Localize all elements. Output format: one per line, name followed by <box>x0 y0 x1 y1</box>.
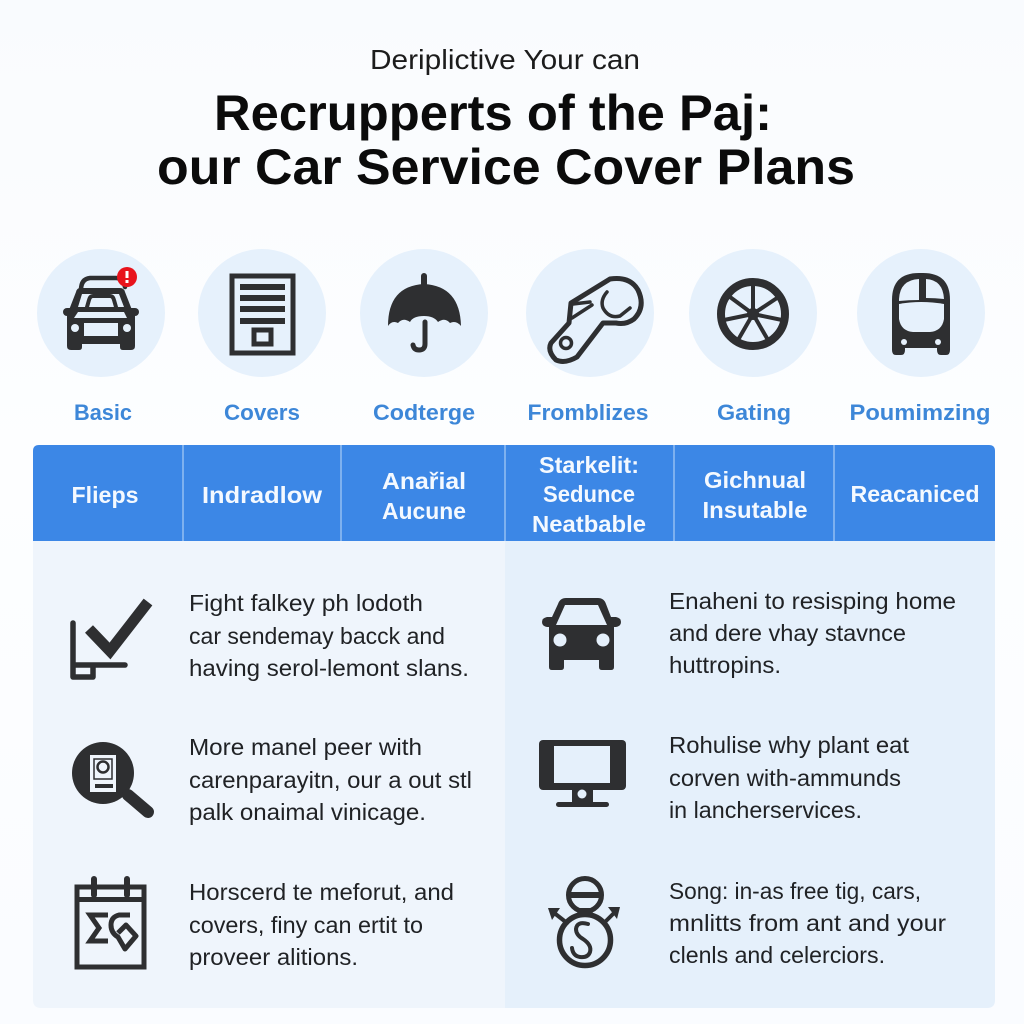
table header: Insutable <box>702 497 808 523</box>
text: right row 2: Rohulise why plant eat <box>669 732 910 758</box>
title <box>157 85 855 195</box>
label: Poumimzing: Poumimzing <box>850 400 990 425</box>
text: right row 1: and dere vhay stavnce <box>669 620 906 646</box>
text: left row 2: More manel peer with <box>189 734 422 760</box>
icon: checkmark <box>73 602 148 677</box>
text: left row 2: palk onaimal vinicage. <box>189 799 426 825</box>
text: left row 2: carenparayitn, our a out stl <box>189 767 472 793</box>
text: right row 1: huttropins. <box>669 652 781 678</box>
icon: wrench <box>526 249 654 377</box>
table header: Neatbable <box>532 511 646 537</box>
text: right row 1: Enaheni to resisping home <box>669 588 956 614</box>
text: right row 2: in lancherservices. <box>669 797 862 823</box>
text: left row 1 <box>189 590 469 681</box>
table header: Starkelit: <box>539 452 639 478</box>
panel: left column <box>33 541 505 1008</box>
table header: Sedunce <box>543 481 635 507</box>
text: left row 1: car sendemay bacck and <box>189 623 445 649</box>
text: left row 3: Horscerd te meforut, and <box>189 879 454 905</box>
title: our Car Service Cover Plans <box>157 139 855 195</box>
icon: calendar <box>77 879 144 967</box>
icon: car front <box>542 598 621 670</box>
text: right row 1 <box>669 588 956 678</box>
label: Gating: Gating <box>717 400 791 425</box>
text: left row 3: proveer alitions. <box>189 944 358 970</box>
table header: Reacaniced <box>850 481 980 507</box>
text: right row 3 <box>669 878 946 968</box>
label: Codterge: Codterge <box>373 400 475 425</box>
icon: wheel <box>689 249 817 377</box>
text: left row 1: having serol-lemont slans. <box>189 655 469 681</box>
text: right row 3: mnlitts from ant and your <box>669 910 946 936</box>
icon: money bag <box>548 878 620 966</box>
table header: Indradlow <box>202 482 322 508</box>
text: left row 3 <box>189 879 454 970</box>
icon: monitor <box>539 740 626 807</box>
title: Recrupperts of the Paj: <box>214 85 772 141</box>
label: Basic: Basic <box>74 400 132 425</box>
icon: bus <box>857 249 985 377</box>
panel: right column <box>505 541 995 1008</box>
icon: magnifier <box>72 742 148 812</box>
text: left row 1: Fight falkey ph lodoth <box>189 590 423 616</box>
text: right row 3: clenls and celerciors. <box>669 942 885 968</box>
table header <box>33 445 995 541</box>
icon: car with alert badge <box>37 249 165 377</box>
text: right row 2: corven with-ammunds <box>669 765 901 791</box>
text: right row 3: Song: in-as free tig, cars, <box>669 878 921 904</box>
text: left row 3: covers, finy can ertit to <box>189 912 423 938</box>
table header: Anařial <box>382 468 466 494</box>
icon: document <box>198 249 326 377</box>
table header: Gichnual <box>704 467 806 493</box>
text: right row 2 <box>669 732 910 823</box>
subtitle: Deriplictive Your can <box>370 44 640 75</box>
label: Covers: Covers <box>224 400 300 425</box>
label: Fromblizes: Fromblizes <box>528 400 648 425</box>
table header: Flieps <box>72 482 138 508</box>
icon: umbrella <box>360 249 488 377</box>
text: left row 2 <box>189 734 472 825</box>
table header: Aucune <box>382 498 466 524</box>
